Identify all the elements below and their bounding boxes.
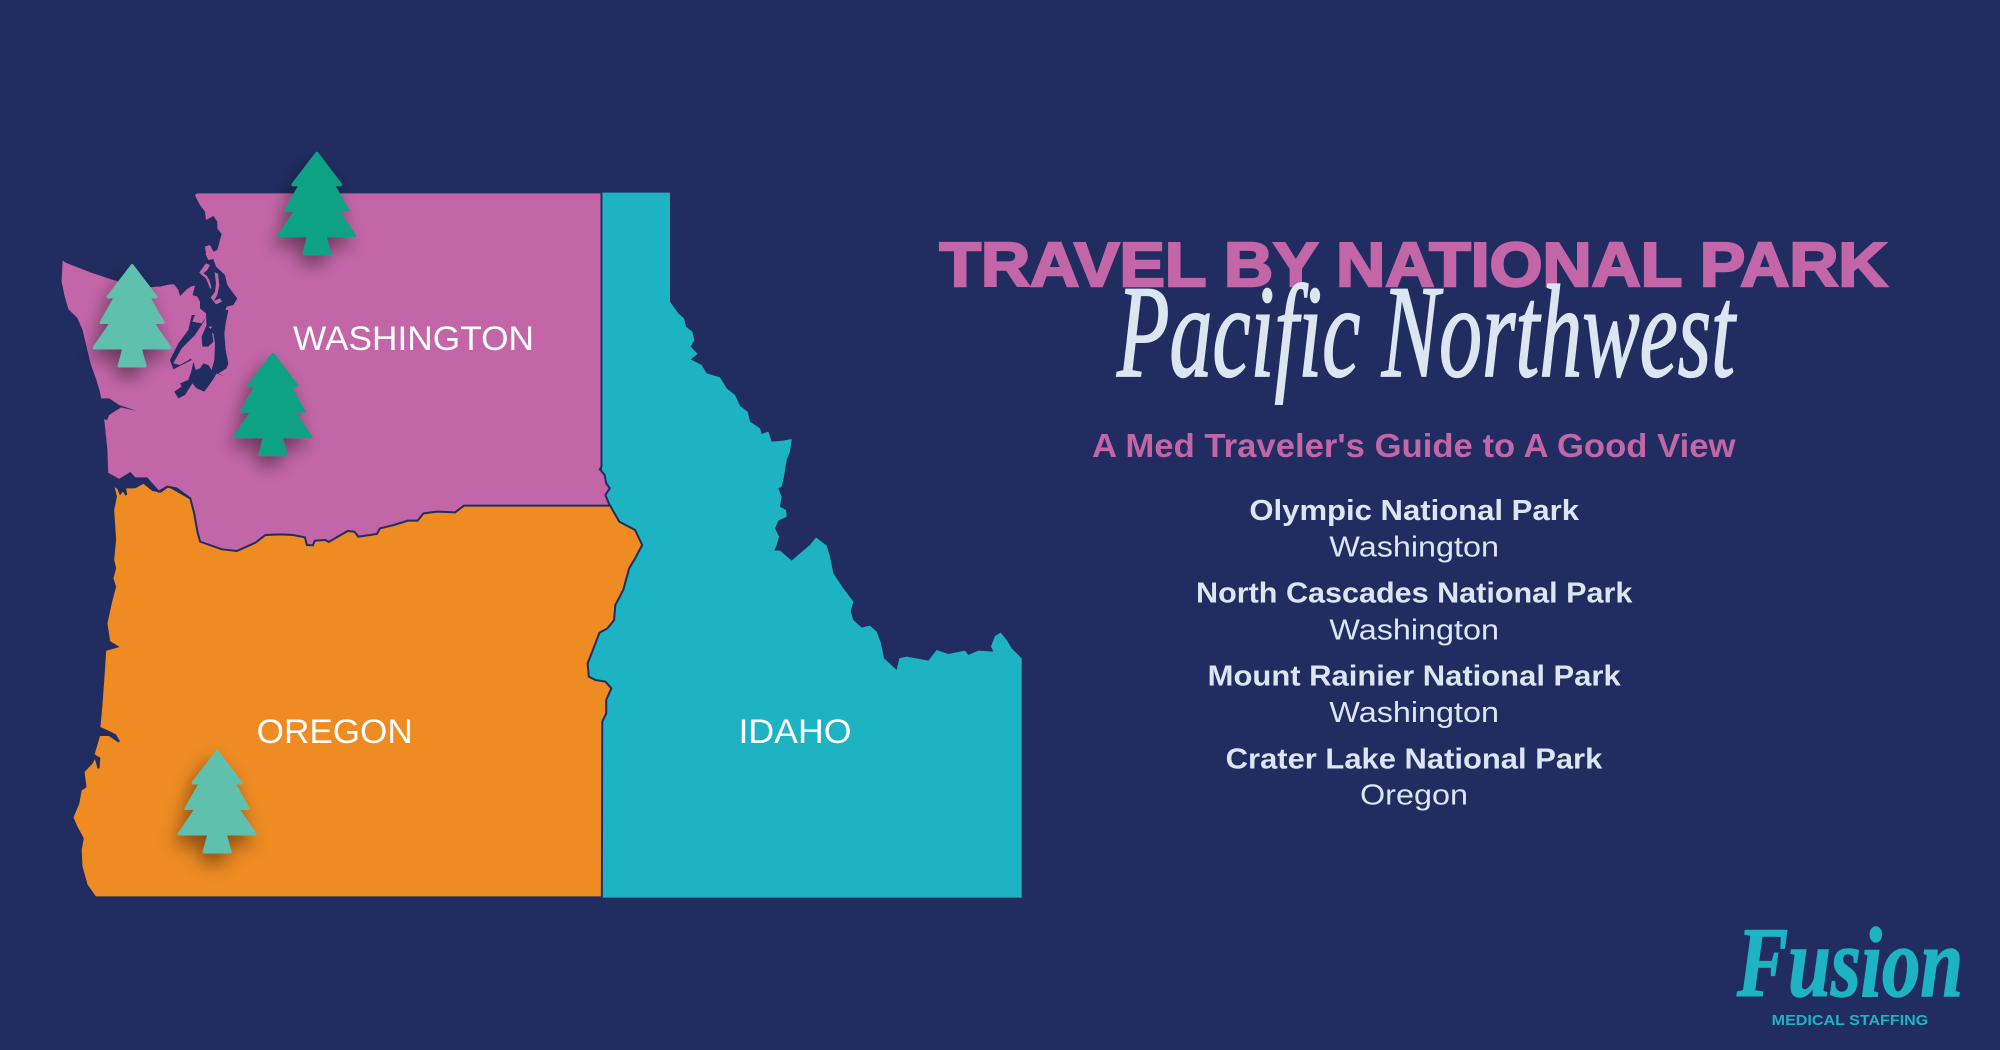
- park: Crater Lake state: Oregon: [1360, 780, 1468, 812]
- tree marker: North Cascades: [279, 153, 355, 254]
- logo: Fusion Medical Staffing: [1736, 907, 1963, 1029]
- park: Mount Rainier state: Washington: [1329, 697, 1499, 729]
- South Puget Sound waters: [170, 310, 228, 398]
- logo tagline: MEDICAL STAFFING: [1772, 1012, 1928, 1029]
- tree marker: Crater Lake: [179, 752, 255, 852]
- park: Mount Rainier name: Mount Rainier National Park: [1208, 661, 1622, 693]
- map of the Pacific Northwest: [61, 188, 1022, 898]
- tagline: A Med Traveler's Guide to A Good View: [1092, 427, 1736, 464]
- North Puget Sound waters and islands: [187, 255, 237, 327]
- script subtitle: Pacific Northwest: Pacific Northwest: [1116, 259, 1737, 406]
- Grays Harbor inlet: [97, 398, 137, 420]
- park: North Cascades state: Washington: [1329, 614, 1499, 646]
- tree marker: Olympic: [94, 266, 170, 366]
- state: Oregon: [72, 483, 642, 897]
- park: Crater Lake name: Crater Lake National Park: [1226, 743, 1603, 775]
- state: Washington: [61, 192, 610, 551]
- Strait and north coast waters: [157, 188, 222, 296]
- title: TRAVEL BY NATIONAL PARK: [940, 231, 1888, 300]
- state label: Oregon: OREGON: [257, 713, 413, 751]
- state label: Washington: WASHINGTON: [293, 320, 534, 358]
- park: North Cascades name: North Cascades National Park: [1196, 578, 1633, 610]
- state label: Idaho: IDAHO: [738, 713, 852, 751]
- tree marker: Mount Rainier: [235, 354, 311, 455]
- park: Olympic state: Washington: [1329, 532, 1499, 564]
- list of national parks: [1196, 495, 1633, 812]
- park: Olympic name: Olympic National Park: [1249, 495, 1580, 527]
- state: Idaho: [553, 193, 1022, 898]
